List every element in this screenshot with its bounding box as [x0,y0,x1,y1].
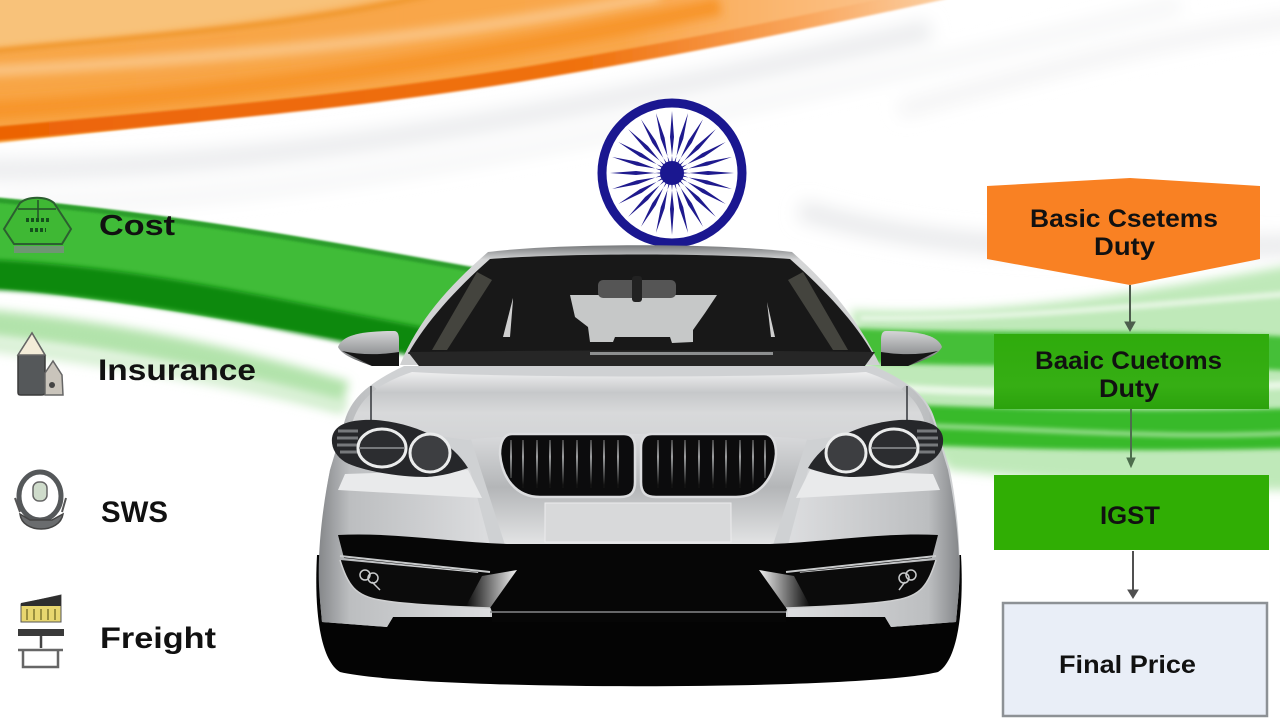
car: lower bumper intakes [338,534,938,622]
left column: cost components [4,198,256,667]
car: black underbody [316,555,962,686]
box: customs duty: Baaic Cuetoms [1035,347,1222,375]
car illustration [316,245,962,686]
box: customs duty: Duty [1099,375,1159,403]
label: Freight: Freight [100,622,216,655]
car: hood [352,372,925,440]
icon: insurance [18,333,63,395]
car: kidney grille [500,434,776,497]
car: headlights [332,420,943,477]
icon: SWS [15,472,66,529]
right column: duty flowchart [987,178,1269,716]
label: Insurance: Insurance [98,354,256,387]
box: final price: Final Price [1059,651,1196,679]
orange wave [0,0,1000,146]
green wave right [850,262,1280,490]
box: orange duty: Basic Csetems [1030,205,1218,233]
car: side mirrors [338,331,942,366]
box: orange duty [987,178,1260,285]
label: SWS: SWS [101,496,168,529]
car: licence plate [545,503,731,542]
arrow: orange to green [1125,285,1135,331]
box: orange duty: Duty [1094,233,1155,261]
box: customs duty [994,334,1269,409]
box: IGST [994,475,1269,550]
box: IGST: IGST [1100,502,1160,530]
car: front body [319,366,960,627]
box: final price [1003,603,1267,716]
icon: freight [18,595,64,667]
car: roof and windshield [400,245,880,374]
label: Cost: Cost [99,210,175,242]
white-grey folds [0,5,1280,248]
arrow: customs to IGST [1127,409,1135,467]
arrow: IGST to final price [1128,551,1138,598]
green wave left [0,196,475,408]
icon: cost [4,198,71,253]
icon: Ashoka Chakra wheel [602,103,742,243]
